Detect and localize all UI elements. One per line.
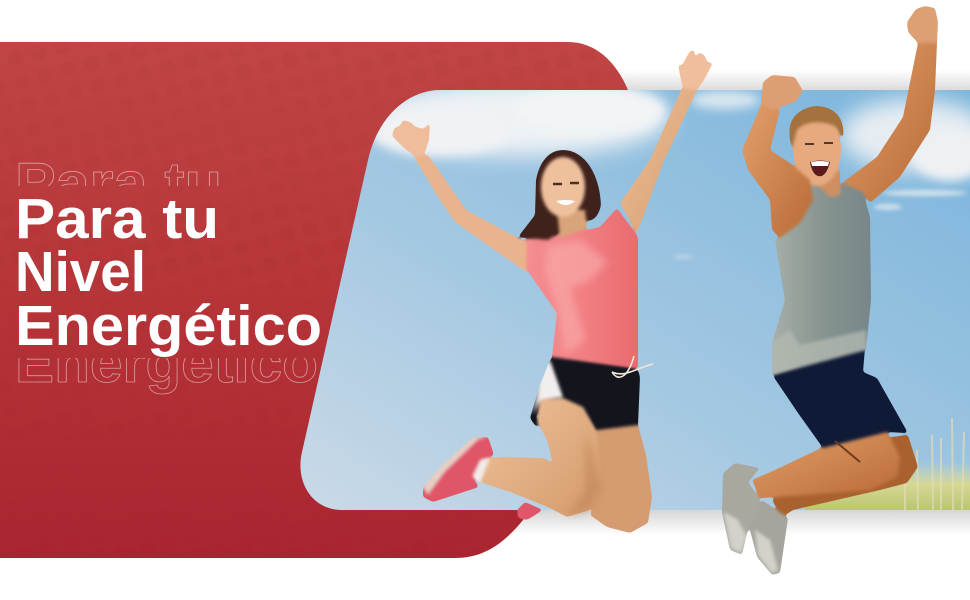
man: left arm bbox=[742, 103, 813, 238]
woman: front shoe bbox=[423, 437, 494, 502]
man: eyes bbox=[805, 143, 833, 144]
man: right arm bbox=[842, 43, 937, 203]
panel: red background bbox=[0, 42, 628, 558]
woman: shorts bbox=[530, 357, 640, 430]
title: Nivel bbox=[15, 240, 146, 304]
man: back leg bbox=[772, 435, 918, 517]
photo: sky panel bbox=[290, 80, 970, 511]
man: tank hem highlight bbox=[772, 330, 866, 375]
woman: right hand bbox=[677, 50, 713, 90]
man: teeth bbox=[811, 161, 829, 166]
woman: shoe sole bbox=[423, 437, 488, 495]
man: mouth bbox=[810, 160, 830, 176]
woman: back shoe bbox=[517, 502, 543, 520]
woman: shirt highlight bbox=[545, 240, 608, 355]
woman: face bbox=[541, 157, 585, 217]
bottom shadow band bbox=[480, 510, 970, 535]
man: head bbox=[793, 114, 841, 186]
woman: sock bbox=[472, 458, 490, 483]
grass bbox=[805, 418, 970, 511]
heading ghost outline: Para tu: Para tu bbox=[15, 151, 222, 215]
man: front shoe bbox=[722, 463, 760, 555]
woman: hair back bbox=[518, 150, 601, 240]
top shadow band bbox=[610, 70, 970, 90]
woman: left arm bbox=[414, 155, 527, 272]
title: Para tu bbox=[15, 187, 219, 251]
man: hair bbox=[789, 106, 843, 148]
photo: woman jumping bbox=[392, 50, 713, 533]
woman: smile bbox=[556, 200, 575, 205]
man: tank top bbox=[772, 177, 871, 375]
woman: knee shading bbox=[567, 430, 602, 517]
woman: neck bbox=[557, 210, 587, 238]
woman: shirt bbox=[525, 208, 638, 368]
woman: left hand bbox=[392, 120, 430, 157]
man: leg crease bbox=[835, 441, 860, 462]
woman: front leg bbox=[480, 398, 602, 517]
man: left fist bbox=[761, 75, 803, 110]
woman: right arm bbox=[620, 88, 697, 233]
man: front leg bbox=[752, 432, 900, 498]
man: back shoe bbox=[750, 500, 788, 575]
woman: eyes bbox=[553, 183, 579, 184]
heading ghost outline: Energético: Energético bbox=[15, 331, 318, 395]
man: right fist bbox=[907, 6, 938, 43]
man: shorts bbox=[773, 348, 908, 448]
photo: man jumping bbox=[722, 6, 938, 575]
title bbox=[15, 187, 322, 358]
man: shoe highlight bbox=[724, 512, 778, 573]
woman: back leg bbox=[590, 425, 652, 533]
man: neck bbox=[812, 170, 840, 197]
title: Energético bbox=[15, 294, 322, 358]
clouds bbox=[370, 80, 970, 259]
woman: shorts white panel bbox=[533, 360, 563, 415]
woman: drawstring bbox=[612, 356, 653, 377]
